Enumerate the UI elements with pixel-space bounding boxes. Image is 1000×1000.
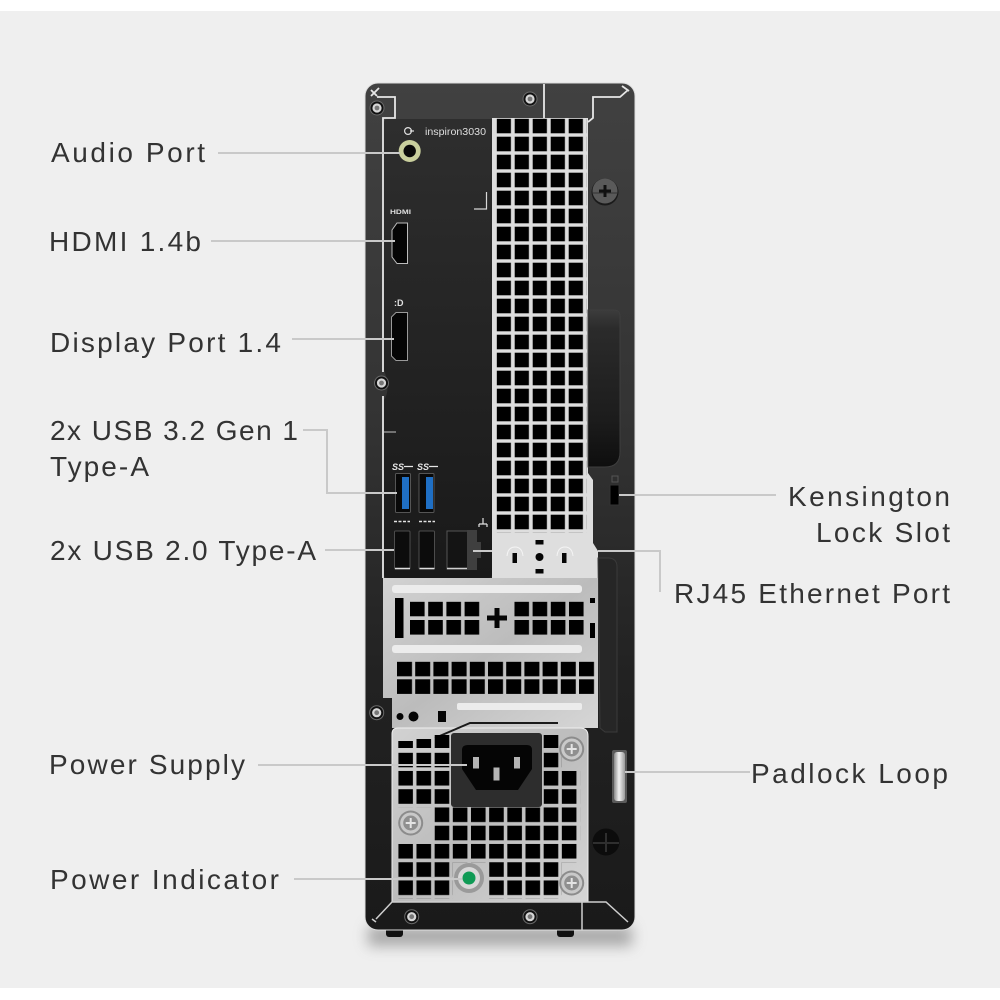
leader line: padlock loop bbox=[625, 771, 750, 773]
audio port bbox=[399, 140, 421, 162]
kensington lock slot bbox=[610, 476, 619, 505]
label: kensington lock slot: Lock Slot bbox=[816, 517, 950, 548]
power indicator light bbox=[454, 863, 484, 893]
HDMI port: HDMI bbox=[390, 209, 411, 216]
tower feet bbox=[386, 926, 574, 937]
DisplayPort port: :D bbox=[394, 298, 404, 308]
metal tab with knockouts bbox=[507, 540, 573, 574]
label: power supply: Power Supply bbox=[49, 749, 245, 780]
panel tick bbox=[384, 431, 396, 433]
label: RJ45 ethernet port: RJ45 Ethernet Port bbox=[674, 578, 950, 609]
USB 3.2 ports: SS bbox=[392, 462, 404, 472]
label: USB 3.2: Type-A bbox=[50, 451, 149, 482]
leader line: USB 2.0 bbox=[325, 549, 394, 551]
HDMI port bbox=[390, 209, 411, 264]
label: kensington lock slot: Kensington bbox=[788, 481, 950, 512]
RJ45 ethernet port bbox=[447, 518, 487, 570]
label: power indicator: Power Indicator bbox=[50, 864, 279, 895]
rear port panel bbox=[384, 119, 492, 578]
leader line: RJ45 bbox=[473, 551, 660, 592]
side latch bbox=[598, 558, 617, 732]
label: USB 3.2: 2x USB 3.2 Gen 1 bbox=[50, 415, 298, 446]
tower body bbox=[365, 83, 635, 930]
desktop tower rear view bbox=[365, 83, 635, 937]
power inlet bbox=[451, 733, 542, 807]
top trim lines bbox=[371, 84, 629, 578]
label: HDMI: HDMI 1.4b bbox=[49, 226, 201, 257]
padlock loop bbox=[612, 750, 627, 803]
label: audio port: Audio Port bbox=[51, 137, 205, 168]
label: display port: Display Port 1.4 bbox=[50, 327, 281, 358]
expansion bracket bbox=[383, 578, 598, 728]
label: padlock loop: Padlock Loop bbox=[751, 758, 948, 789]
leader line: HDMI bbox=[211, 240, 395, 242]
USB 2.0 ports bbox=[394, 522, 435, 569]
label: USB 2.0: 2x USB 2.0 Type-A bbox=[50, 535, 316, 566]
mounting screws bbox=[370, 92, 537, 924]
power supply grille bbox=[392, 723, 588, 902]
leader line: USB 3.2 bbox=[303, 430, 397, 493]
icon: headset bbox=[405, 128, 414, 134]
leader line: power supply bbox=[258, 764, 467, 766]
leader line: kensington bbox=[619, 494, 776, 496]
USB 3.2 ports bbox=[392, 462, 438, 512]
alignment mark bbox=[474, 192, 486, 209]
rear black screw bbox=[592, 828, 620, 856]
model name: inspiron3030 bbox=[425, 126, 486, 138]
top screw bbox=[592, 178, 618, 206]
vent grille bbox=[492, 118, 598, 578]
leader line: power indicator bbox=[294, 878, 462, 880]
USB 3.2 ports: SS bbox=[417, 462, 429, 472]
leader line: display port bbox=[292, 338, 394, 340]
floor shadow bbox=[368, 926, 632, 946]
DisplayPort port bbox=[392, 298, 408, 360]
bottom trim bbox=[372, 902, 628, 930]
leader line: audio port bbox=[218, 152, 400, 154]
power supply screws bbox=[398, 736, 584, 896]
handle recess bbox=[588, 310, 620, 467]
